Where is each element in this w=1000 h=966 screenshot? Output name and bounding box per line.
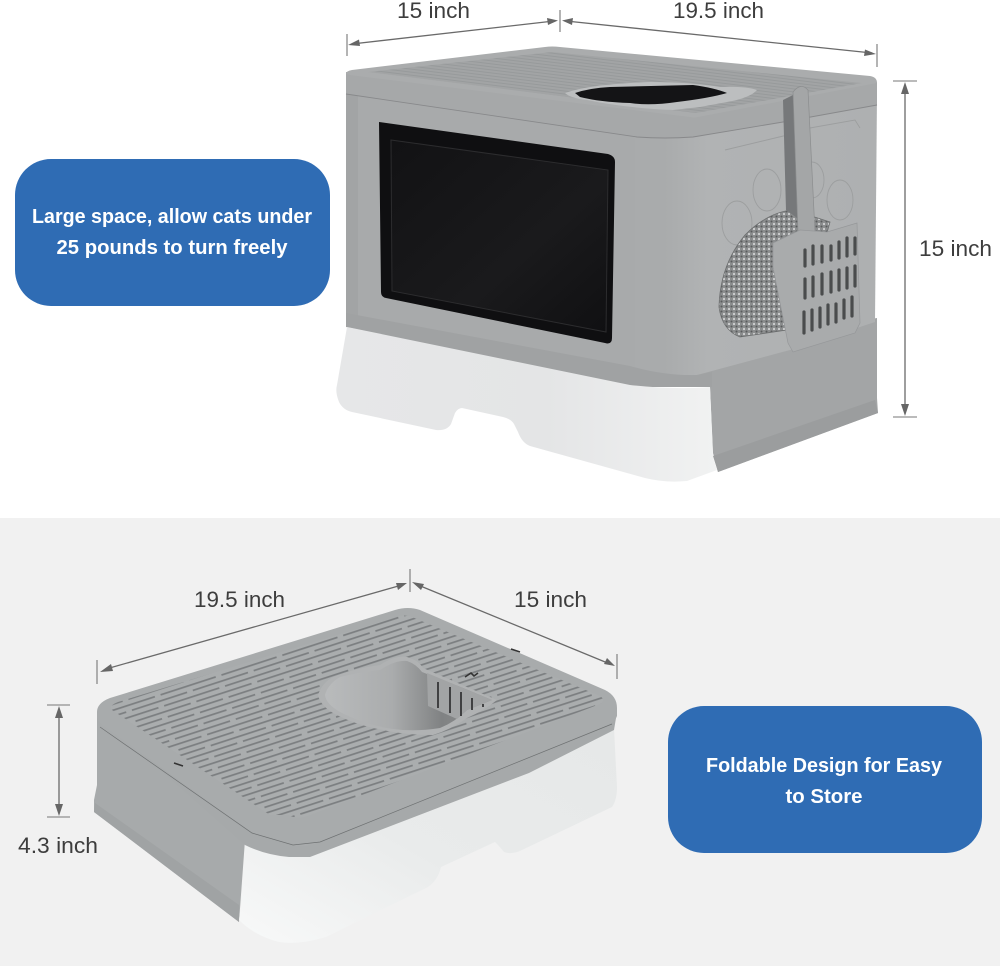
dimension: 15 inch height [893, 81, 992, 417]
mesh vent [719, 210, 830, 337]
lid top stripes [368, 52, 862, 113]
scoop handle shadow [783, 95, 800, 220]
lid side [346, 72, 877, 138]
seam line [100, 724, 612, 845]
lower right lip [713, 400, 878, 472]
lock marks [174, 649, 520, 766]
scoop handle [793, 86, 815, 232]
lower right side [635, 318, 878, 472]
callout: foldable design [668, 706, 982, 853]
dimension: 15 inch top [347, 0, 560, 56]
bottom band [346, 313, 712, 387]
lid skirt [97, 712, 617, 857]
front frame left strip [346, 92, 358, 316]
bottom background [0, 518, 1000, 966]
dimension: 4.3 inch [18, 705, 98, 858]
lid top rim [346, 46, 877, 118]
dimension: 4.3 inch: 4.3 inch [18, 833, 98, 858]
callout: foldable design: to Store [786, 786, 862, 808]
window pane [391, 140, 608, 332]
grille surface [111, 616, 603, 818]
product: folded litter box [94, 608, 617, 943]
dimension: 15 inch bottom [412, 582, 617, 679]
dimension: 15 inch bottom: 15 inch [514, 587, 587, 612]
dimension: 19.5 inch top [562, 0, 877, 67]
dimension: 19.5 inch bottom: 19.5 inch [194, 587, 285, 612]
callout: foldable design: Foldable Design for Easy [706, 755, 943, 777]
white base [239, 728, 617, 943]
dimension: 19.5 inch bottom [97, 569, 410, 684]
top background [0, 0, 1000, 518]
scoop head [773, 223, 860, 352]
lid opening [565, 82, 757, 110]
callout: large space: 25 pounds to turn freely [56, 237, 288, 259]
white drawer [336, 327, 717, 482]
dimension: 15 inch height: 15 inch [919, 236, 992, 261]
opening [318, 657, 497, 735]
window frame [379, 122, 615, 343]
callout: large space: Large space, allow cats under [32, 206, 312, 228]
left side lip [94, 803, 239, 922]
callout: large space [15, 159, 330, 306]
paw prints [722, 120, 860, 245]
grey left side [94, 712, 245, 922]
body right side [635, 95, 877, 375]
product: assembled litter box [336, 46, 878, 482]
lid rim [97, 608, 617, 846]
lid seam [346, 94, 877, 138]
body front panel [346, 90, 635, 368]
